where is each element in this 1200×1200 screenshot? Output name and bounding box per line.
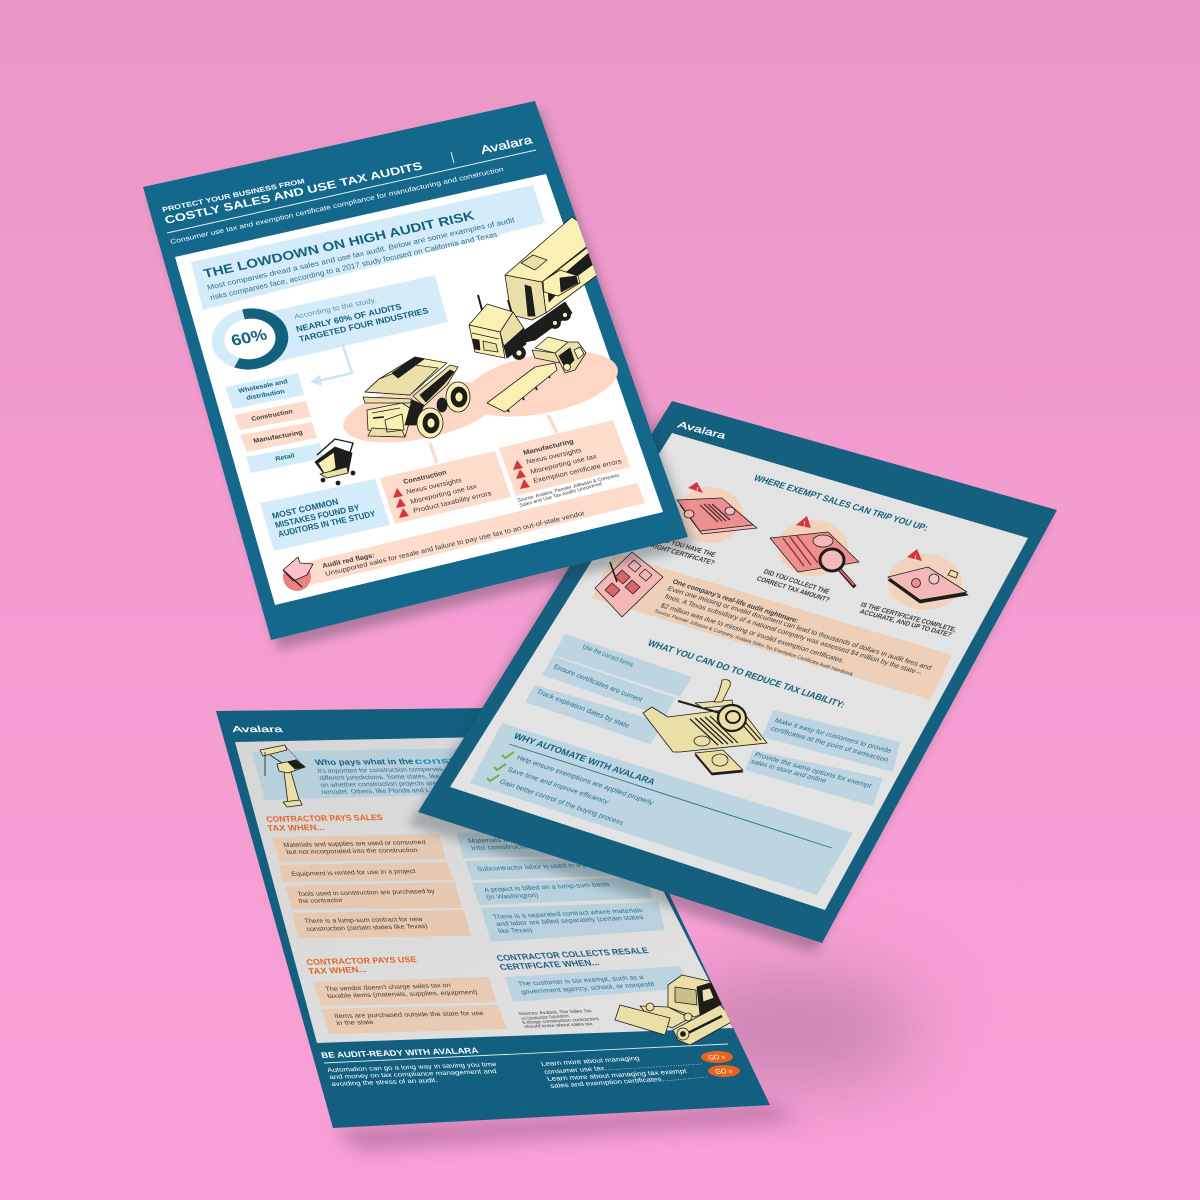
icon: green check 1 <box>502 752 514 758</box>
heading: contractor collects resale certificate: CERTIFICATE WHEN... <box>498 957 601 972</box>
icon: warning 4 <box>513 460 523 470</box>
panel: sales tax cases: There is a lump-sum contract for new <box>303 916 424 925</box>
icon: tablet with chart: ! <box>914 555 917 563</box>
icon: warning 5 <box>516 469 526 479</box>
callout: according to the study: NEARLY 60% OF AUDITS <box>295 302 403 334</box>
text: captions for exempt sales icons <box>649 536 958 638</box>
text: captions for exempt sales icons: ACCURATE, AND UP TO DATE? <box>858 607 953 638</box>
callout: according to the study: According to the study, <box>293 296 378 321</box>
icon: checklist tablet <box>595 552 663 617</box>
icon: warning 2 <box>396 498 406 508</box>
shadow of page 1 <box>150 110 695 650</box>
button: go 2: GO » <box>714 1068 734 1077</box>
footer: be audit-ready <box>320 1044 740 1089</box>
panel: four industries list: Retail <box>274 452 295 462</box>
chart: 60 percent donut <box>212 308 288 370</box>
panel: right actions: sales in store and online <box>749 757 828 785</box>
panel: left actions: Ensure certificates are current <box>552 662 645 704</box>
panel: most common mistakes <box>260 479 390 551</box>
panel: contractor does not pay cases: (in Washington) <box>485 893 540 901</box>
panel: sales tax cases: Materials and supplies are used or consumed <box>283 839 426 849</box>
panel: use tax cases <box>313 977 507 1034</box>
footer: be audit-ready: Learn more about managing <box>540 1054 641 1067</box>
panel: construction mistakes: Construction <box>403 469 448 486</box>
footer: be audit-ready: sales and exemption certificates <box>549 1076 663 1089</box>
logo: Avalara: Avalara <box>231 725 284 734</box>
callout: real-life audit nightmare: $2 million was due to missing or invalid exemption certificates. <box>659 602 846 665</box>
logo: Avalara: Avalara <box>676 419 729 442</box>
panel: right actions <box>745 710 900 806</box>
panel: lowdown intro: THE LOWDOWN ON HIGH AUDIT RISK <box>202 208 476 281</box>
callout: according to the study <box>255 275 448 363</box>
header: title: COSTLY SALES AND USE TAX AUDITS <box>163 160 424 227</box>
text: captions for exempt sales icons: DO YOU HAVE THE <box>659 536 717 559</box>
panel: use tax cases: Items are purchased outside the state for use <box>334 1010 484 1020</box>
button: go 1 <box>701 1051 733 1063</box>
intro banner: It's important for construction companies <box>316 766 444 775</box>
heading: contractor collects resale certificate <box>495 946 650 972</box>
panel: sales tax cases: Equipment is rented for use in a project <box>291 868 417 878</box>
intro banner: remodel. Others, like Florida and L <box>320 786 430 795</box>
page 2: exempt sales sheet, right: WHERE EXEMPT SALES CAN TRIP YOU UP: <box>752 473 930 533</box>
panel: resale certificate case: government agency, school, or nonprofit <box>520 981 656 996</box>
panel: left actions: Track expiration dates by state <box>535 687 632 729</box>
panel: sales tax cases: but not incorporated into the construction <box>286 847 419 856</box>
header: title: PROTECT YOUR BUSINESS FROM <box>161 178 306 214</box>
footer: be audit-ready: avoiding the stress of an audit. <box>330 1076 438 1087</box>
icon: shopping cart <box>315 439 355 485</box>
icon: green check 2 <box>494 764 506 770</box>
header: title: Avalara <box>479 133 534 156</box>
heading: contractor pays sales tax: CONTRACTOR PAYS SALES <box>266 814 384 824</box>
heading: contractor pays use tax: CONTRACTOR PAYS USE <box>306 955 418 968</box>
intro banner: Who pays what in the <box>314 757 415 767</box>
panel: resale certificate case: The customer is tax exempt, such as a <box>517 974 645 988</box>
page 2: exempt sales sheet, right: WHAT YOU CAN DO TO REDUCE TAX LIABILITY: <box>646 638 847 710</box>
footer: be audit-ready: Automation can go a long way in saving you time <box>326 1060 497 1073</box>
panel: construction mistakes: Misreporting use tax <box>410 483 478 506</box>
panel: most common mistakes: MISTAKES FOUND BY <box>274 502 361 530</box>
callout: according to the study: TARGETED FOUR INDUSTRIES <box>298 306 430 344</box>
panel: sales tax cases: Tools used in construction are purchased by <box>296 888 436 898</box>
callout: real-life audit nightmare <box>592 553 952 700</box>
panel: four industries list: Construction <box>251 408 294 423</box>
footer: be audit-ready: Learn more about managing tax exempt <box>546 1068 688 1083</box>
icon: certificate: ! <box>696 487 699 495</box>
intro banner <box>252 746 590 800</box>
panel: sales tax cases: the contractor <box>298 898 344 905</box>
icon: crane <box>260 745 305 807</box>
panel: why automate with Avalara: WHY AUTOMATE WITH AVALARA <box>512 731 657 787</box>
callout: audit red flags: Audit red flags: <box>322 553 376 570</box>
panel: why automate with Avalara <box>470 723 853 895</box>
icon: dump truck <box>363 357 470 438</box>
panel: sales tax cases <box>272 834 471 938</box>
icon: flatbed truck <box>487 337 586 412</box>
panel: construction mistakes: Nexus oversights <box>405 477 463 496</box>
header: title <box>161 133 536 246</box>
panel: most common mistakes: MOST COMMON <box>271 496 340 521</box>
footer: be audit-ready: consumer use tax <box>543 1065 607 1076</box>
panel: contractor does not pay cases: Subcontractor labor is used in a project <box>476 861 606 873</box>
icon: tax report and magnifier <box>770 516 859 587</box>
text: source note: Sales and Use Tax Audits Uncovered <box>519 482 603 508</box>
footer: be audit-ready: and money on tax compliance management and <box>328 1068 497 1080</box>
panel: sales tax cases: construction (certain states like Texas) <box>306 923 429 933</box>
panel: manufacturing mistakes: Misreporting use tax <box>530 453 598 476</box>
chart: 60 percent donut: 60% <box>229 327 269 350</box>
page 2: exempt sales sheet, right <box>418 401 1057 943</box>
panel: four industries list: Wholesale and <box>238 379 289 395</box>
panel: why automate with Avalara: Help ensure exemptions are applied properly <box>515 754 655 807</box>
heading: contractor pays use tax <box>306 955 418 976</box>
panel: manufacturing mistakes <box>499 420 630 496</box>
heading: contractor pays sales tax <box>266 814 384 833</box>
panel: contractor does not pay cases: Materials and supplies are incorporated <box>467 833 611 845</box>
page 1: audit risk sheet, top: Source: Avalara, Pannier Jolliason & Company, <box>517 472 620 503</box>
intro banner: different jurisdictions. Some states, like <box>318 773 441 782</box>
panel: most common mistakes: AUDITORS IN THE STUDY <box>277 509 377 539</box>
icon: warning 6 <box>520 479 530 489</box>
icon: stamp, scroll, magnifier and notebook <box>643 680 767 775</box>
panel: four industries list: Manufacturing <box>253 430 304 445</box>
panel: manufacturing mistakes: Manufacturing <box>523 439 575 457</box>
panel: four industries list <box>225 373 324 473</box>
panel: use tax cases: The vendor doesn't charge sales tax on <box>324 982 452 993</box>
panel: why automate with Avalara: Gain better control of the buying process <box>498 778 625 827</box>
heading: contractor collects resale certificate: CONTRACTOR COLLECTS RESALE <box>495 946 650 963</box>
intro banner: on whether construction projects are <box>319 779 437 788</box>
heading: contractor pays use tax: TAX WHEN... <box>307 964 367 976</box>
soft floor shadow <box>333 975 920 1150</box>
panel: use tax cases: in the state <box>336 1019 375 1027</box>
footer: be audit-ready: BE AUDIT-READY WITH AVALARA <box>320 1046 480 1060</box>
panel: use tax cases: taxable items (materials, supplies, equipment) <box>327 989 479 1000</box>
icon: certificate <box>677 482 757 543</box>
shadow of page 2 <box>408 412 1050 953</box>
text: captions for exempt sales icons: RIGHT CERTIFICATE? <box>649 543 716 567</box>
panel: right actions: certificates at the point of transaction <box>769 725 890 764</box>
panel: why automate with Avalara: Save time and improve efficiency <box>506 766 611 805</box>
arrow: to industries <box>310 343 352 386</box>
text: sources: on Construction Conundrum; <box>520 1013 570 1021</box>
page 3: construction sheet, bottom <box>216 707 770 1128</box>
page 1: audit risk sheet, top <box>143 101 688 640</box>
text: sources: Sources: Avalara, The Sales Tax <box>518 1009 593 1016</box>
panel: manufacturing mistakes: Exemption certificate errors <box>532 457 623 485</box>
panel: construction mistakes: Product taxability errors <box>412 489 493 515</box>
panel: manufacturing mistakes: Nexus oversights <box>525 447 583 466</box>
icon: red flag <box>283 557 313 591</box>
text: source note <box>517 472 620 508</box>
heading: contractor pays sales tax: TAX WHEN... <box>266 823 326 833</box>
panel: left actions: Use the correct forms <box>581 643 635 669</box>
panel: contractor does not pay cases: into construction <box>470 843 536 852</box>
text: sources: should know about sales tax <box>524 1022 594 1029</box>
panel: lowdown intro <box>191 185 545 310</box>
decorative peach ellipses <box>337 340 625 463</box>
icon: tax report and magnifier: ! <box>803 521 806 529</box>
panel: contractor does not pay cases <box>457 830 665 942</box>
button: go 1: GO » <box>707 1054 727 1063</box>
icon: tablet with chart <box>888 549 968 610</box>
panel: contractor does not pay cases: and labor are billed separately (certain states <box>495 914 645 928</box>
panel: contractor does not pay cases: A project is billed on a lump-sum basis <box>483 881 611 894</box>
intro banner: construction <box>413 755 506 766</box>
callout: audit red flags <box>303 483 645 585</box>
icon: warning 3 <box>399 508 409 518</box>
icon: green check 3 <box>487 775 499 781</box>
panel: right actions: Make it easy for customers to provide <box>773 717 893 755</box>
button: go 2 <box>708 1065 740 1077</box>
text: sources <box>518 1009 600 1029</box>
panel: contractor does not pay cases: There is a separated contract where materials <box>492 907 644 921</box>
text: captions for exempt sales icons: DID YOU COLLECT THE <box>762 569 831 596</box>
panel: contractor does not pay cases: like Texas) <box>497 927 534 935</box>
text: sources: 5 things construction contractors <box>522 1017 600 1025</box>
panel: construction mistakes <box>380 451 511 524</box>
icon: warning 1 <box>393 488 403 498</box>
panel: left actions <box>525 634 692 744</box>
panel: resale certificate case <box>505 966 688 1002</box>
text: captions for exempt sales icons: CORRECT TAX AMOUNT? <box>755 574 832 604</box>
panel: four industries list: distribution <box>246 388 286 402</box>
text: captions for exempt sales icons: IS THE CERTIFICATE COMPLETE, <box>859 600 958 633</box>
panel: right actions: Provide the same options for exempt <box>753 751 873 790</box>
callout: real-life audit nightmare: One company's real-life audit nightmare: <box>671 578 800 625</box>
icon: bulldozer <box>615 975 735 1045</box>
icon: tractor trailer <box>469 217 604 360</box>
